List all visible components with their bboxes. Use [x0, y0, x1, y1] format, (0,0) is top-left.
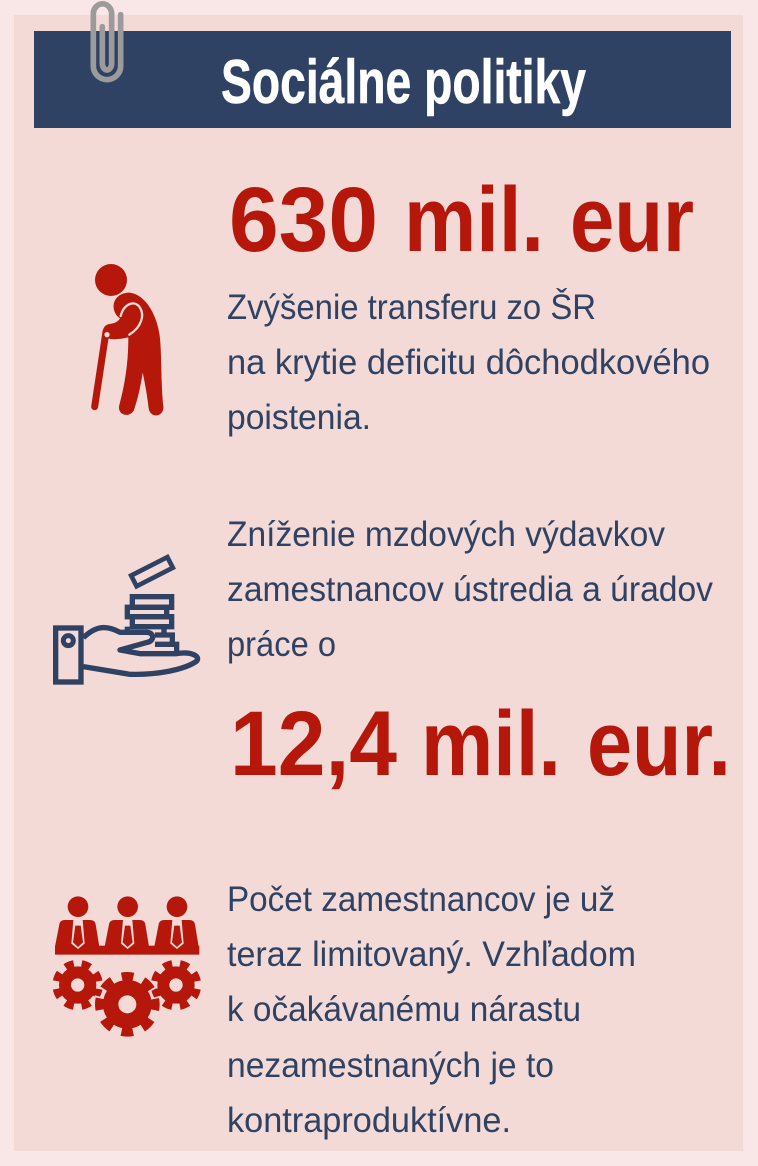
text block: staffing description: teraz limitovaný. Vzhľadom — [227, 935, 636, 974]
big number: 630 mil. eur: 630 — [229, 169, 378, 271]
section: pension transfer — [95, 169, 710, 437]
big number: 12,4 mil. eur. — [230, 693, 731, 795]
big number: 630 mil. eur: mil. — [404, 169, 544, 271]
text block: staffing description — [227, 880, 636, 1140]
text block: wage description: zamestnancov ústredia a úradov — [227, 570, 713, 609]
big number: 12,4 mil. eur.: eur. — [587, 693, 731, 795]
icon: paperclip — [93, 4, 121, 80]
icon: elderly person with cane — [95, 264, 163, 415]
big number: 12,4 mil. eur.: 12,4 — [230, 693, 397, 795]
text block: staffing description: Počet zamestnancov je už — [227, 880, 615, 919]
text block: wage description — [227, 515, 713, 664]
text block: staffing description: nezamestnaných je to — [227, 1046, 554, 1085]
big number: 12,4 mil. eur.: mil. — [421, 693, 561, 795]
text block: pension description: poistenia. — [227, 398, 371, 437]
text block: pension description: Zvýšenie transferu zo ŠR — [227, 288, 596, 327]
big number: 630 mil. eur — [229, 169, 694, 271]
header banner — [34, 31, 731, 128]
text block: staffing description: kontraproduktívne. — [227, 1101, 511, 1140]
section: wage cuts — [56, 515, 731, 795]
title: Sociálne politiky — [221, 48, 586, 117]
icon: people and gears — [55, 896, 199, 1032]
text block: wage description: Zníženie mzdových výdavkov — [227, 515, 665, 554]
text block: wage description: práce o — [227, 625, 336, 664]
text block: staffing description: k očakávanému nárastu — [227, 990, 581, 1029]
icon: hand holding coins — [56, 557, 198, 682]
big number: 630 mil. eur: eur — [570, 169, 694, 271]
text block: pension description — [227, 288, 710, 437]
section: staffing — [55, 880, 636, 1140]
text block: pension description: na krytie deficitu dôchodkového — [227, 343, 710, 382]
